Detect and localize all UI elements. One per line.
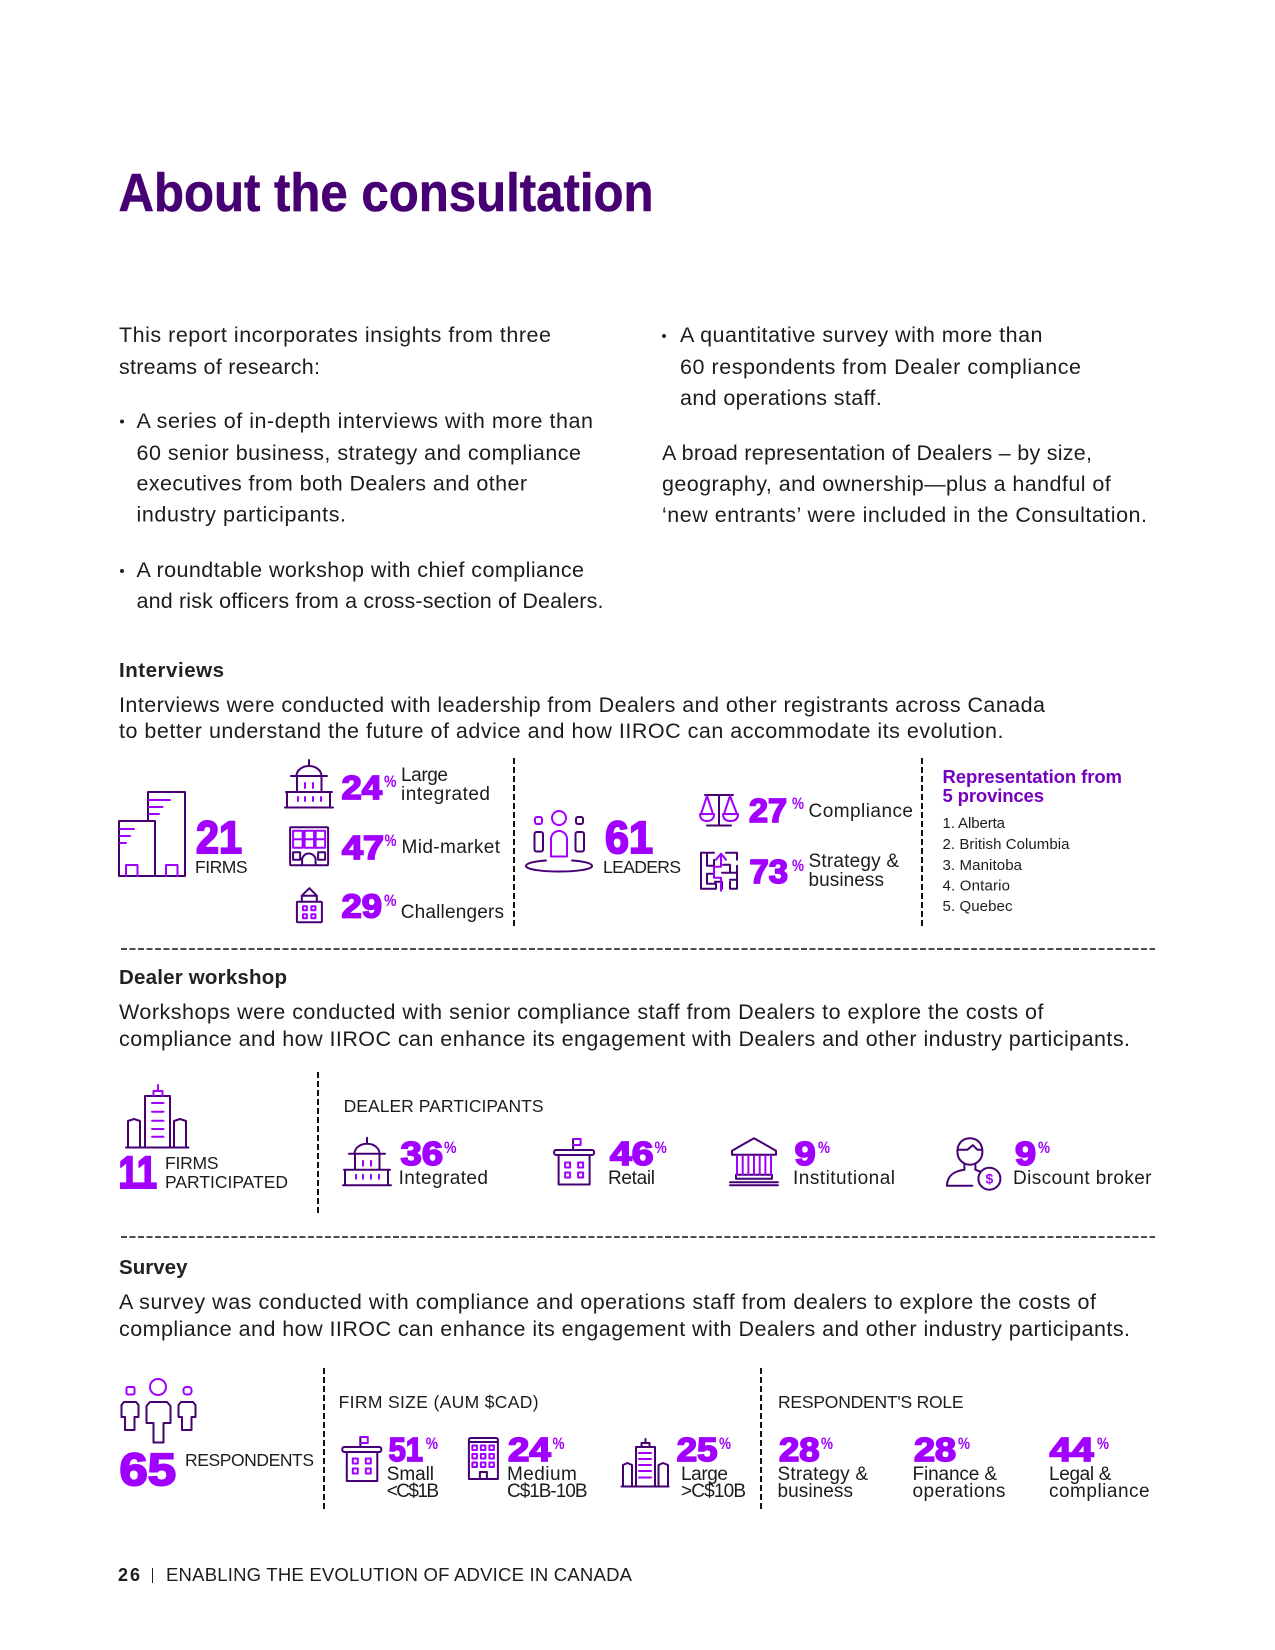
text block: interviews description: Interviews were conducted with leadership from Dealers and other registrants across Canada xyxy=(119,693,1045,717)
stat: 9% discount broker: Discount broker xyxy=(1013,1168,1152,1189)
stat: 46% retail: 46 xyxy=(610,1135,654,1172)
stat: 47% mid-market: 47 xyxy=(342,829,384,866)
heading: dealer workshop: Dealer workshop xyxy=(119,966,287,989)
text block: intro right column: geography, and ownership—plus a handful of xyxy=(662,472,1111,496)
text block: workshop description: Workshops were conducted with senior compliance staff from Dealers to explore the costs of xyxy=(119,1000,1044,1024)
text block: intro left column: A series of in-depth interviews with more than xyxy=(136,409,593,433)
stat: 11 firms participated: 11 xyxy=(118,1147,157,1198)
text block: intro left column: A roundtable workshop with chief compliance xyxy=(136,558,584,582)
callout: representation from 5 provinces: 2. British Columbia xyxy=(942,836,1070,853)
stat: 73% strategy and business: % xyxy=(792,856,804,875)
stat: 44% legal and compliance: Legal & xyxy=(1049,1464,1112,1485)
text block: intro left column: and risk officers from a cross-section of Dealers. xyxy=(136,589,604,613)
panel: interviews xyxy=(119,659,1122,928)
stat: 9% institutional: % xyxy=(818,1138,830,1157)
stat: 24% medium: Medium xyxy=(507,1464,577,1485)
text block: survey description: A survey was conducted with compliance and operations staff from dealers to explore the costs of xyxy=(119,1290,1096,1314)
stat: 47% mid-market xyxy=(342,829,501,866)
text block: intro right column: ‘new entrants’ were included in the Consultation. xyxy=(662,503,1147,527)
stat: 9% institutional: 9 xyxy=(795,1135,816,1172)
icon: respondents xyxy=(122,1379,196,1442)
stat: 24% medium: % xyxy=(552,1434,564,1453)
panel: dealer workshop xyxy=(118,966,1152,1214)
icon: tower with side buildings xyxy=(126,1085,188,1148)
text block: workshop description: compliance and how IIROC can enhance its engagement with Dealers and other industry participants. xyxy=(119,1027,1130,1051)
text block: survey description xyxy=(119,1290,1130,1341)
heading: respondent's role: RESPONDENT'S ROLE xyxy=(778,1392,964,1412)
stat: 47% mid-market: % xyxy=(384,831,396,850)
text block: interviews description: to better understand the future of advice and how IIROC can accommodate its evolution. xyxy=(119,719,1004,743)
stat: 28% strategy and business: 28 xyxy=(779,1431,820,1468)
stat: 9% discount broker xyxy=(1013,1135,1152,1189)
stat: 65 respondents: RESPONDENTS xyxy=(185,1450,314,1470)
stat: 65 respondents: 65 xyxy=(120,1444,176,1495)
stat: 61 leaders: LEADERS xyxy=(603,857,681,877)
stat: 9% institutional: Institutional xyxy=(793,1168,895,1189)
stat: 29% challengers xyxy=(342,888,504,924)
text block: intro left column xyxy=(119,323,604,613)
stat: 25% large: >C$10B xyxy=(681,1481,746,1502)
stat: 73% strategy and business: Strategy & xyxy=(808,851,899,872)
text block: intro right column xyxy=(662,323,1147,527)
callout: representation from 5 provinces: Representation from xyxy=(942,766,1122,787)
stat: 28% finance and operations: 28 xyxy=(914,1431,956,1468)
stat: 36% integrated: % xyxy=(444,1138,456,1157)
icon: maze xyxy=(701,853,737,891)
stat: 46% retail: % xyxy=(654,1138,667,1157)
stat: 44% legal and compliance: % xyxy=(1097,1434,1109,1453)
icon: leaders xyxy=(526,811,592,872)
stat: 27% compliance: % xyxy=(792,794,804,813)
stat: 21 firms: 21 xyxy=(196,812,242,863)
text block: intro left column: This report incorporates insights from three xyxy=(119,323,551,347)
stat: 61 leaders: 61 xyxy=(605,812,653,863)
text block: intro left column: 60 senior business, strategy and compliance xyxy=(136,441,581,465)
callout: representation from 5 provinces: 5 provinces xyxy=(942,785,1044,806)
stat: 73% strategy and business: business xyxy=(808,870,884,891)
stat: 9% discount broker: 9 xyxy=(1015,1135,1036,1172)
stat: 29% challengers: Challengers xyxy=(401,902,504,923)
stat: 47% mid-market: Mid-market xyxy=(402,837,501,858)
stat: 28% strategy and business: % xyxy=(821,1434,833,1453)
text block: intro left column: executives from both Dealers and other xyxy=(136,472,527,496)
stat: 28% strategy and business: business xyxy=(778,1481,853,1502)
text block: intro right column: A broad representation of Dealers – by size, xyxy=(662,441,1092,465)
callout: representation from 5 provinces: 3. Manitoba xyxy=(942,857,1023,874)
footer: 26 xyxy=(118,1565,140,1585)
icon: person with dollar coin: $ xyxy=(986,1171,994,1187)
text block: survey description: compliance and how IIROC can enhance its engagement with Dealers and other industry participants. xyxy=(119,1317,1130,1341)
stat: 27% compliance: 27 xyxy=(749,792,787,829)
stat: 28% finance and operations: operations xyxy=(912,1481,1005,1502)
stat: 28% finance and operations: Finance & xyxy=(912,1464,997,1485)
panel: survey xyxy=(119,1256,1150,1510)
stat: 11 firms participated: PARTICIPATED xyxy=(165,1172,288,1192)
icon: office buildings xyxy=(119,792,185,876)
stat: 46% retail xyxy=(608,1135,667,1189)
icon: institution xyxy=(730,1138,778,1185)
stat: 29% challengers: % xyxy=(384,891,396,910)
icon: large firm xyxy=(622,1439,668,1486)
title: About the consultation xyxy=(118,163,654,223)
stat: 24% medium: 24 xyxy=(508,1431,551,1468)
stat: 51% small: % xyxy=(426,1434,438,1453)
callout: representation from 5 provinces: 1. Alberta xyxy=(942,815,1006,832)
text block: intro left column: industry participants. xyxy=(136,502,346,526)
text block: intro right column: 60 respondents from Dealer compliance xyxy=(680,355,1081,379)
stat: 9% institutional xyxy=(793,1135,895,1189)
icon: small firm xyxy=(342,1437,381,1481)
stat: 21 firms: FIRMS xyxy=(195,857,248,877)
stat: 36% integrated: 36 xyxy=(401,1135,443,1172)
text block: intro right column: and operations staff. xyxy=(680,386,882,410)
icon: retail building xyxy=(554,1139,594,1184)
callout: representation from 5 provinces: 5. Quebec xyxy=(942,898,1013,915)
stat: 29% challengers: 29 xyxy=(342,888,382,924)
stat: 25% large: % xyxy=(719,1434,731,1453)
stat: 28% strategy and business xyxy=(778,1431,868,1502)
stat: 51% small: Small xyxy=(387,1464,434,1485)
icon: capitol xyxy=(285,760,333,808)
callout: representation from 5 provinces: 4. Ontario xyxy=(942,878,1010,894)
icon: person with dollar coin xyxy=(947,1138,1000,1190)
stat: 11 firms participated: FIRMS xyxy=(165,1153,218,1173)
stat: 9% discount broker: % xyxy=(1038,1138,1050,1157)
heading: dealer participants: DEALER PARTICIPANTS xyxy=(344,1096,544,1116)
icon: capitol xyxy=(343,1138,391,1185)
stat: 61 leaders xyxy=(603,812,681,877)
stat: 65 respondents xyxy=(120,1444,314,1495)
stat: 51% small xyxy=(387,1431,439,1502)
stat: 24% large integrated: Large xyxy=(401,765,448,786)
stat: 24% large integrated: 24 xyxy=(342,769,383,806)
stat: 24% medium xyxy=(507,1431,588,1502)
icon: mid-market building xyxy=(290,827,328,865)
stat: 46% retail: Retail xyxy=(608,1168,655,1189)
text block: intro left column: streams of research: xyxy=(119,355,320,379)
stat: 28% strategy and business: Strategy & xyxy=(778,1464,868,1485)
stat: 27% compliance: Compliance xyxy=(808,801,913,822)
stat: 24% large integrated xyxy=(342,765,490,806)
text block: interviews description xyxy=(119,693,1045,743)
stat: 44% legal and compliance xyxy=(1049,1431,1150,1502)
icon: scales xyxy=(700,795,738,826)
stat: 36% integrated xyxy=(399,1135,488,1189)
icon: medium firm xyxy=(469,1438,498,1479)
stat: 73% strategy and business xyxy=(750,851,899,891)
text block: intro right column: A quantitative survey with more than xyxy=(680,323,1042,347)
stat: 25% large: 25 xyxy=(677,1431,718,1468)
stat: 24% large integrated: integrated xyxy=(401,784,490,805)
stat: 25% large xyxy=(677,1431,746,1502)
stat: 51% small: 51 xyxy=(389,1431,423,1468)
icon: small building xyxy=(297,888,322,922)
stat: 24% large integrated: % xyxy=(384,772,396,791)
stat: 51% small: <C$1B xyxy=(387,1481,439,1502)
heading: firm size: FIRM SIZE (AUM $CAD) xyxy=(339,1392,539,1412)
text block: workshop description xyxy=(119,1000,1130,1051)
stat: 25% large: Large xyxy=(681,1464,728,1485)
stat: 27% compliance xyxy=(749,792,913,829)
stat: 44% legal and compliance: compliance xyxy=(1049,1481,1150,1502)
heading: interviews: Interviews xyxy=(119,659,224,682)
stat: 28% finance and operations: % xyxy=(958,1434,970,1453)
callout: representation from 5 provinces xyxy=(942,766,1122,915)
stat: 24% medium: C$1B-10B xyxy=(507,1481,588,1502)
footer: ENABLING THE EVOLUTION OF ADVICE IN CANADA xyxy=(166,1564,633,1585)
stat: 44% legal and compliance: 44 xyxy=(1050,1431,1094,1468)
stat: 36% integrated: Integrated xyxy=(399,1168,488,1189)
heading: survey: Survey xyxy=(119,1256,188,1279)
stat: 11 firms participated xyxy=(118,1147,288,1198)
stat: 73% strategy and business: 73 xyxy=(750,853,788,890)
stat: 28% finance and operations xyxy=(912,1431,1005,1502)
